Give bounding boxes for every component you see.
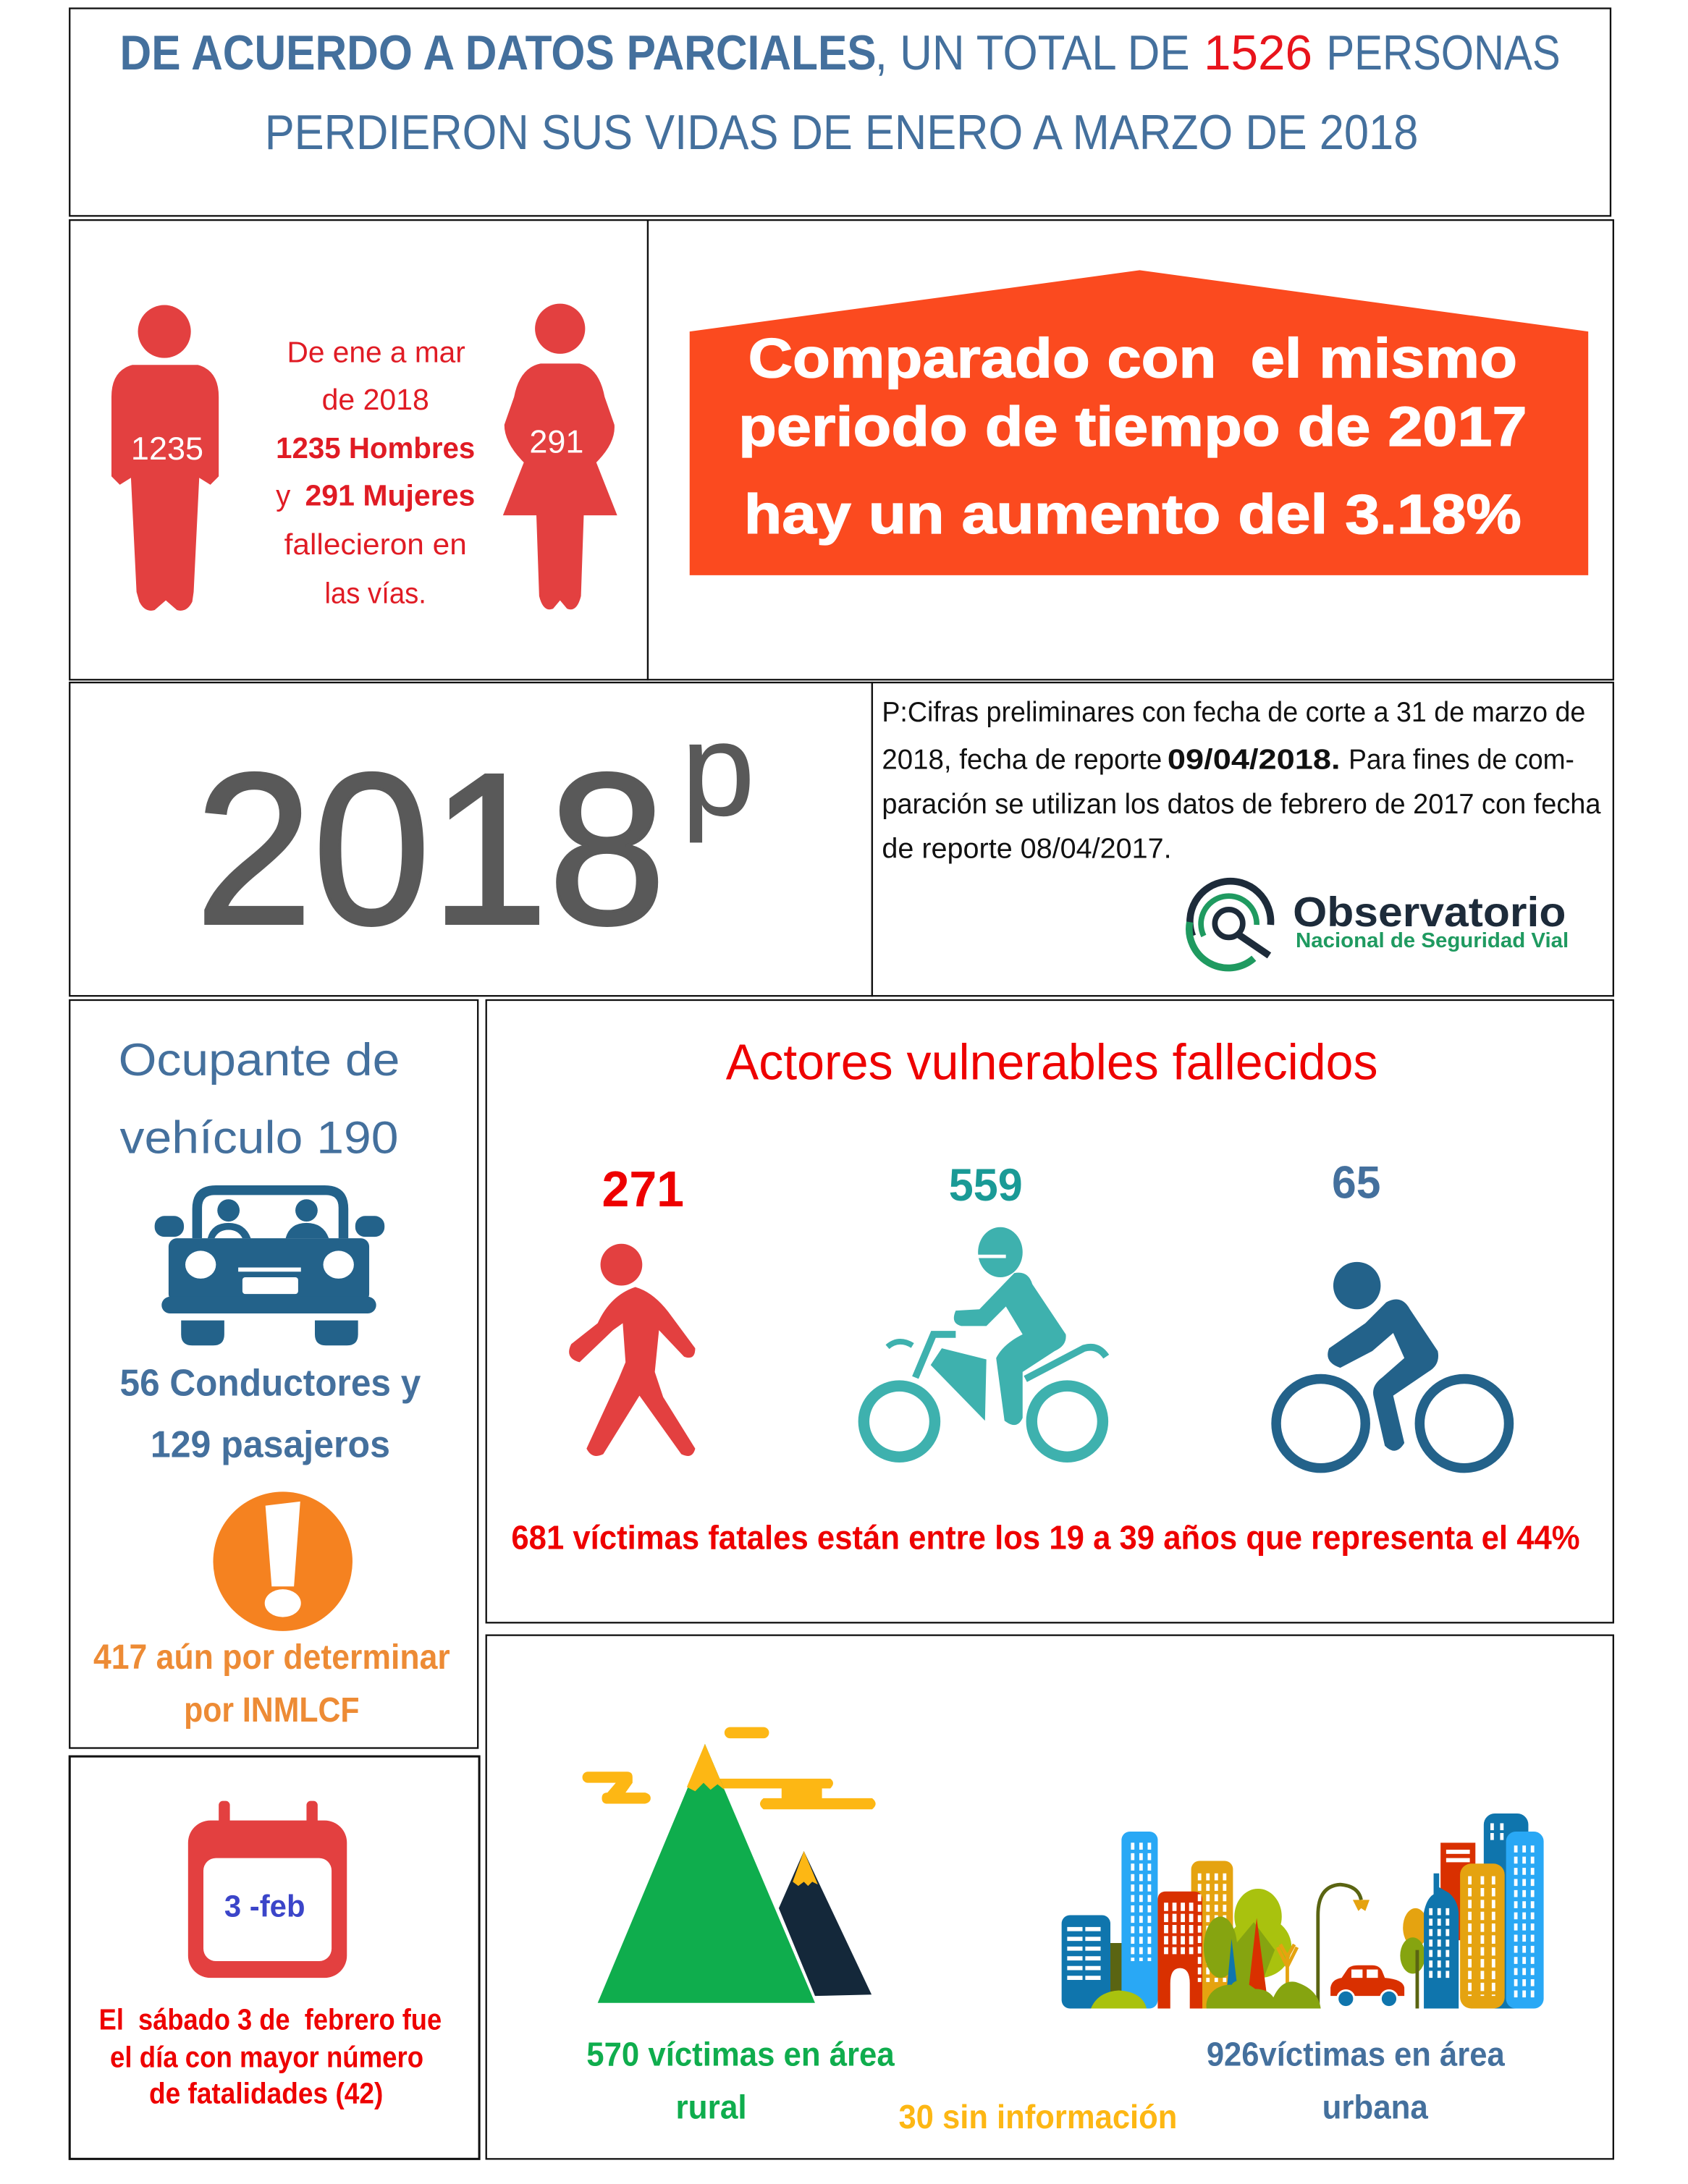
text: drivers and passengers: 129 pasajeros: [151, 1423, 390, 1465]
callout: orange house: Comparado con el mismo: [748, 328, 1517, 390]
text: deadliest day: el día con mayor número: [110, 2040, 423, 2073]
panel: vulnerable actors: [486, 1000, 1613, 1622]
heading line 2: PERDIERON SUS VIDAS DE ENERO A MARZO DE 2018: [265, 106, 1418, 160]
text: preliminary note: [882, 697, 1601, 865]
text: men and women counts: de 2018: [322, 383, 429, 416]
text: drivers and passengers: 56 Conductores y: [120, 1363, 421, 1405]
text: preliminary note: 09/04/2018.: [1168, 744, 1341, 775]
text: men and women counts: las vías.: [324, 576, 426, 609]
panel: rural and urban: [486, 1635, 1613, 2159]
text: preliminary note: Para fines de com-: [1349, 744, 1574, 775]
text: urban victims: [1207, 2035, 1505, 2126]
text: deadliest day: [99, 2002, 442, 2109]
panel: men and women: [69, 220, 648, 680]
icon: motorcycle: [864, 1227, 1106, 1457]
heading: occupants: [119, 1035, 400, 1164]
big year 2018p: p: [681, 695, 755, 843]
text: men and women counts: 1235 Hombres: [276, 431, 475, 465]
heading line 1: DE ACUERDO A DATOS PARCIALES: [120, 26, 877, 80]
text: deadliest day: El sábado 3 de febrero fue: [99, 2002, 442, 2036]
heading line 1: , UN TOTAL DE: [875, 26, 1190, 80]
big year 2018p: 2018: [195, 729, 666, 970]
callout: orange house: [690, 270, 1588, 575]
text: deadliest day: de fatalidades (42): [149, 2076, 383, 2109]
callout: orange house: hay un aumento del 3.18%: [744, 483, 1522, 546]
text: rural victims: [586, 2035, 895, 2126]
panel: comparison: [648, 220, 1613, 680]
callout: orange house: periodo de tiempo de 2017: [738, 396, 1527, 458]
text: urban victims: 926víctimas en área: [1207, 2035, 1505, 2073]
logo: Observatorio: [1189, 881, 1569, 968]
icon: pedestrian: [569, 1244, 695, 1456]
text: urban victims: urbana: [1322, 2088, 1428, 2126]
heading: vulnerable actors: Actores vulnerables fallecidos: [726, 1034, 1378, 1091]
icon: calendar: [188, 1801, 347, 1978]
number: cyclists: 65: [1332, 1157, 1380, 1208]
icon: exclamation: [213, 1491, 353, 1631]
icon: mountains: [583, 1727, 876, 2003]
text: preliminary note: paración se utilizan los datos de febrero de 2017 con fecha: [882, 789, 1601, 820]
text: men and women counts: y: [276, 479, 291, 512]
text: undetermined: [93, 1638, 450, 1730]
sub-icon: red car: [1330, 1965, 1404, 2007]
text: preliminary note: P:Cifras preliminares con fecha de corte a 31 de marzo de: [882, 697, 1585, 728]
icon: woman: 291: [529, 425, 583, 460]
text: rural victims: 570 víctimas en área: [586, 2035, 895, 2073]
text: age group: 681 víctimas fatales están entre los 19 a 39 años que representa el 44%: [511, 1518, 1580, 1556]
number: pedestrians: 271: [602, 1161, 684, 1217]
text: men and women counts: [276, 335, 475, 609]
text: no information: 30 sin información: [898, 2098, 1177, 2136]
text: rural victims: rural: [675, 2088, 747, 2126]
icon: bicycle: [1276, 1262, 1508, 1468]
text: preliminary note: 2018, fecha de reporte: [882, 744, 1162, 775]
heading line 1: 1526: [1204, 26, 1312, 80]
text: preliminary note: de reporte 08/04/2017.: [882, 834, 1172, 865]
text: men and women counts: 291 Mujeres: [305, 479, 475, 512]
panel: deadliest day: [69, 1756, 479, 2159]
heading line 1: [120, 26, 1561, 80]
icon: woman: [503, 304, 617, 609]
number: motorcyclists: 559: [949, 1160, 1023, 1211]
icon: man: [111, 305, 219, 611]
panel: title: [69, 9, 1611, 216]
text: undetermined: 417 aún por determinar: [93, 1638, 450, 1677]
panel: preliminary note and logo: [872, 682, 1613, 996]
heading: occupants: vehículo 190: [120, 1113, 398, 1164]
text: men and women counts: fallecieron en: [284, 528, 467, 561]
text: men and women counts: De ene a mar: [287, 335, 465, 368]
icon: car: [155, 1185, 384, 1345]
logo: Observatorio: Nacional de Seguridad Vial: [1296, 929, 1569, 952]
icon: calendar: 3 -feb: [224, 1889, 305, 1923]
logo: Observatorio: Observatorio: [1293, 889, 1566, 936]
heading: occupants: Ocupante de: [119, 1035, 400, 1085]
text: drivers and passengers: [120, 1363, 421, 1465]
panel: year: [69, 682, 872, 996]
icon: city: [1062, 1813, 1544, 2008]
panel: vehicle occupants: [69, 1000, 478, 1748]
text: undetermined: por INMLCF: [184, 1690, 360, 1730]
icon: man: 1235: [131, 431, 203, 467]
heading line 1: PERSONAS: [1326, 26, 1561, 80]
